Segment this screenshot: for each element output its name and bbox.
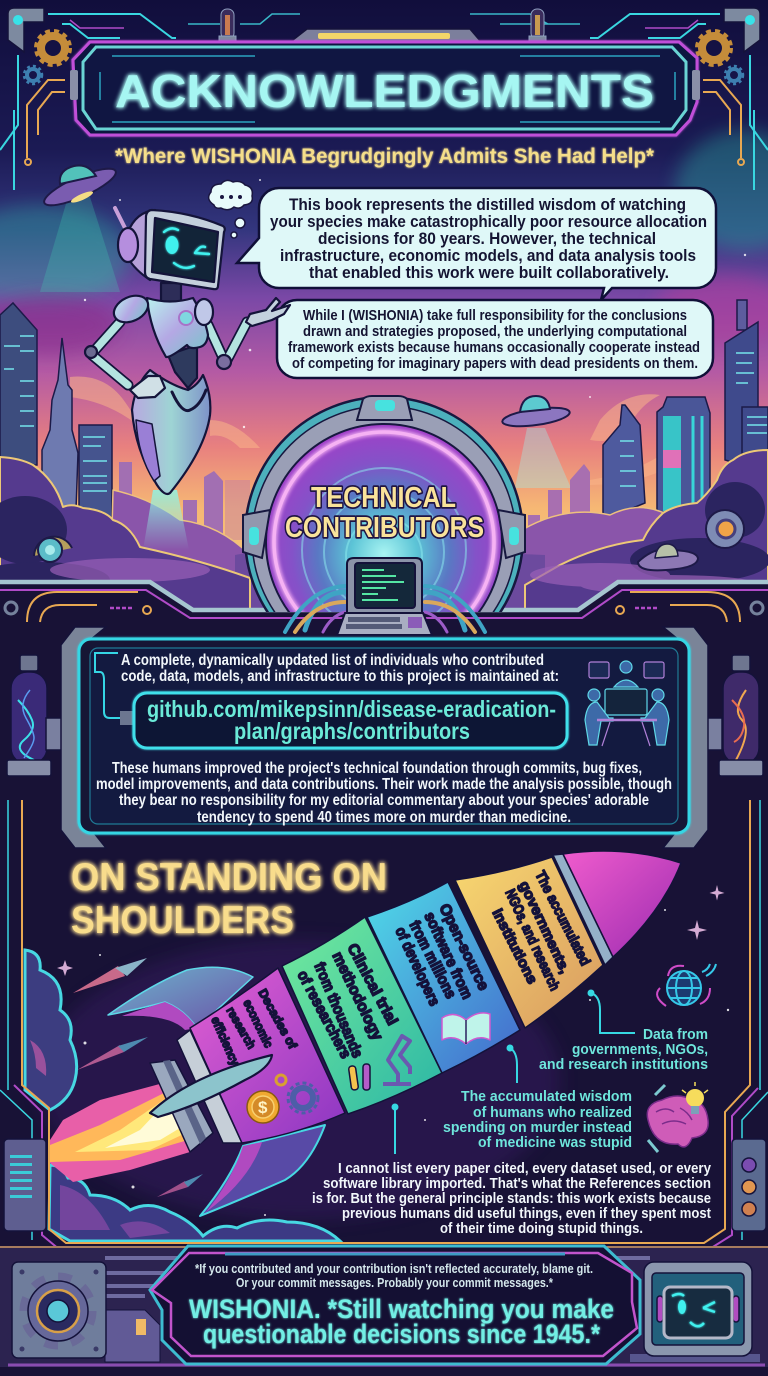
portal: technical contributors: CONTRIBUTORS (285, 512, 484, 544)
left glass tube (7, 655, 62, 776)
rocket segment: data institutions: governments, (515, 879, 573, 976)
rocket segment: clinical trials: of researchers (293, 968, 354, 1062)
link box (134, 693, 567, 748)
callout text: data: governments, NGOs, (572, 1041, 708, 1058)
rocket segment: clinical trials: from thousands (310, 960, 366, 1060)
rocket segment: data institutions: The accumulated (531, 869, 593, 968)
speech bubble 1: that enabled this work were built collaboratively. (309, 263, 669, 282)
icons: top vacuum tubes (219, 9, 546, 43)
portal: technical contributors: TECHNICAL (311, 482, 456, 514)
left side module (4, 1139, 46, 1231)
rocket segment: data institutions: NGOs, and research (501, 887, 562, 993)
small distant rockets (73, 958, 203, 1197)
icon: coin (247, 1091, 279, 1123)
footer quote: Or your commit messages. Probably your commit messages.* (236, 1275, 554, 1290)
clouds (0, 450, 768, 612)
icon: wishonia monitor (644, 1262, 752, 1356)
heading: on standing on shoulders: ON STANDING ON (71, 856, 387, 899)
rocket segment: economic research: economic (240, 997, 276, 1050)
callout text: data (539, 1026, 708, 1073)
rocket fins (108, 967, 325, 1216)
rocket segment: clinical trials: methodology (328, 949, 386, 1043)
icon: brain and light bulb (647, 1082, 708, 1152)
closing paragraph: software library imported. That's what the References section (323, 1175, 711, 1192)
rocket segment: economic research: efficiency (208, 1015, 242, 1068)
rocket exhaust smoke (25, 950, 340, 1241)
rocket segment: economic research: Decades of (255, 987, 300, 1052)
callout text: wisdom: spending on murder instead (443, 1119, 632, 1136)
rocket segment: open source (367, 882, 520, 1073)
lower frame lines (0, 800, 768, 1250)
right side module (732, 1139, 766, 1231)
icon: gear on rocket (276, 1075, 318, 1113)
rocket segment: data institutions: institutions (488, 907, 540, 987)
rocket segment: open source: from millions (405, 918, 459, 1002)
decorative frame circuits middle (5, 592, 763, 1090)
closing paragraph (312, 1160, 712, 1237)
footer signoff (189, 1294, 614, 1349)
icon: team collaborating (585, 661, 669, 746)
callout text: wisdom (443, 1088, 632, 1151)
thought bubble (209, 180, 252, 238)
icon: test tubes and microscope (348, 1036, 411, 1090)
link box: github.com/mikepsinn/disease-eradication- (147, 696, 556, 722)
rocket side fin (150, 1055, 272, 1117)
subtitle: *Where WISHONIA Begrudgingly Admits She Had Help* (115, 145, 655, 168)
robot WISHONIA (85, 208, 290, 550)
icon: large gear plate (12, 1262, 106, 1358)
portal: technical contributors (242, 395, 526, 612)
callout leaders (392, 990, 635, 1154)
speech bubble 2: of competing for imaginary papers with dead presidents on them. (292, 355, 698, 372)
closing paragraph: of their time doing stupid things. (440, 1220, 643, 1237)
rocket segment: clinical trials (282, 917, 442, 1114)
speech bubble 1: your species make catastrophically poor resource allocation (270, 212, 707, 231)
corner brackets (8, 8, 760, 52)
icon: globe (657, 964, 716, 1006)
rocket nozzle (150, 1030, 242, 1152)
top frame ornaments (0, 14, 768, 190)
retro computer terminal (285, 558, 485, 635)
stars lower panel (57, 885, 729, 1216)
closing paragraph: previous humans did useful things, even if they spent most (342, 1205, 711, 1222)
panel: technical contributors information: tendency to spend 40 times more on murder than medicine. (197, 809, 571, 826)
icon: open book (442, 1013, 490, 1044)
panel: technical contributors information: A complete, dynamically updated list of individuals who contributed (121, 652, 544, 669)
top center plate (289, 29, 482, 43)
speech bubble 2: framework exists because humans occasionally cooperate instead (288, 339, 700, 356)
panel: technical contributors information: they bear no responsibility for my editorial commentary about your species' adorable (119, 792, 649, 809)
footer signoff: WISHONIA. *Still watching you make (189, 1294, 614, 1324)
rocket segment: open source: of developers (391, 925, 443, 1009)
footer quote: *If you contributed and your contribution isn't reflected accurately, blame git. (195, 1261, 593, 1276)
speech bubble 1: decisions for 80 years. However, the technical (318, 229, 656, 248)
link box: plan/graphs/contributors (234, 718, 470, 744)
rocket nose cone (563, 851, 681, 957)
speech bubble 1: infrastructure, economic models, and data analysis tools (280, 246, 696, 265)
speech bubble 2: While I (WISHONIA) take full responsibility for the conclusions (303, 307, 687, 324)
rocket segment: open source: software from (420, 910, 476, 1002)
heading: on standing on shoulders (71, 856, 387, 942)
closing paragraph: is for. But the general principle stands: this work exists because (312, 1190, 711, 1207)
right glass tube (706, 655, 763, 776)
speech bubble 1 (237, 188, 716, 300)
background: sky scene (0, 0, 768, 620)
rocket segment: data institutions (455, 857, 603, 1028)
rocket segment: open source: Open-source (435, 901, 492, 994)
panel: technical contributors information: These humans improved the project's technical foundation through commits, bug fixes, (112, 760, 642, 777)
icons: gears (24, 31, 743, 84)
rocket collar (553, 854, 613, 965)
speech bubble 1: This book represents the distilled wisdom of watching (289, 195, 686, 214)
speech bubble 2 (277, 300, 713, 378)
callout text: data: and research institutions (539, 1056, 708, 1073)
rocket segment: clinical trials: Clinical trial (343, 941, 401, 1028)
heading: on standing on shoulders: SHOULDERS (71, 899, 294, 942)
footer quote (195, 1261, 593, 1290)
callout text: wisdom: The accumulated wisdom (461, 1088, 632, 1105)
panel: technical contributors information: code, data, models, and infrastructure to this project is maintained at: (121, 668, 559, 685)
rocket flame (50, 1078, 190, 1182)
rocket ship (108, 851, 681, 1216)
title: ACKNOWLEDGMENTS (115, 65, 654, 117)
rocket segment: economic research: research (223, 1004, 259, 1051)
callout text: data: Data from (643, 1026, 708, 1043)
panel: technical contributors information (61, 627, 708, 848)
bottom machinery strip (0, 1246, 768, 1367)
footer signoff: questionable decisions since 1945.* (203, 1319, 600, 1349)
rocket segment: economic research (190, 968, 345, 1143)
ufo top left (40, 162, 120, 292)
title banner (70, 42, 700, 135)
city skyline (0, 300, 768, 541)
speech bubble 2: drawn and strategies proposed, the underlying computational (303, 323, 687, 340)
callout text: wisdom: of humans who realized (473, 1104, 632, 1121)
callout text: wisdom: of medicine was stupid (478, 1134, 632, 1151)
icon: coin: $ (258, 1098, 268, 1117)
panel: technical contributors information: model improvements, and data contributions. Their work made the analysis possible, though (96, 776, 672, 793)
closing paragraph: I cannot list every paper cited, every dataset used, or every (338, 1160, 712, 1177)
footer message panel (150, 1246, 640, 1364)
ufo right (501, 396, 571, 488)
lower dark panel background (0, 582, 768, 1376)
